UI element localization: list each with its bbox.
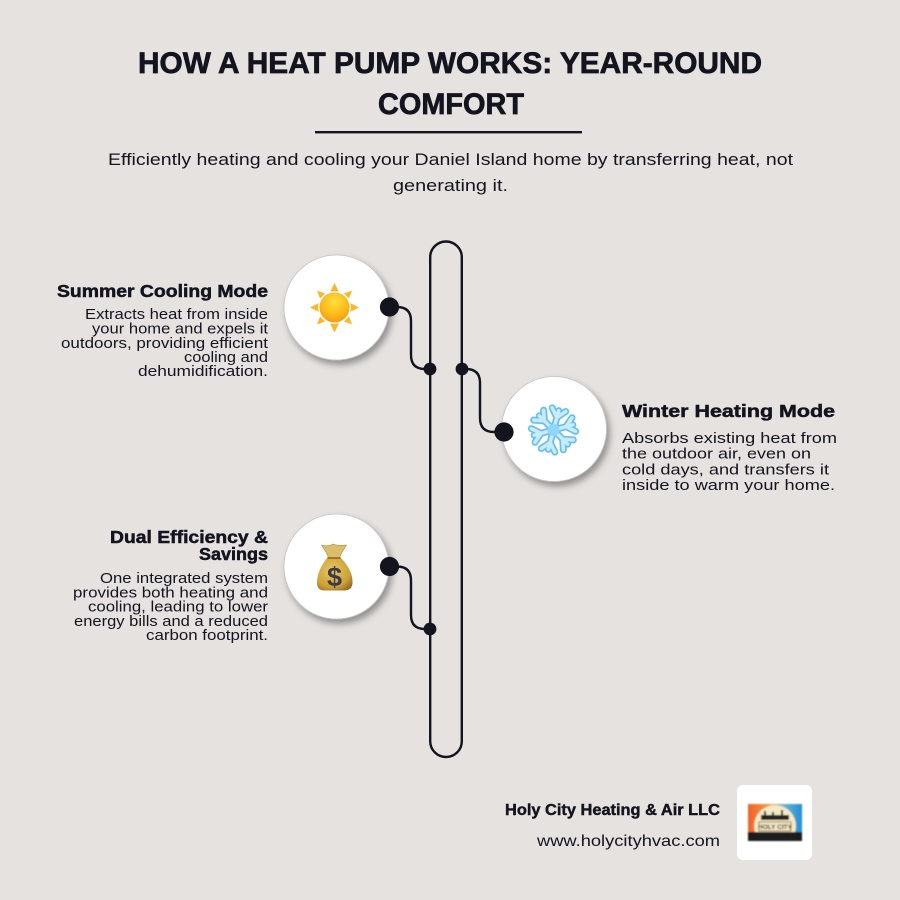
panel: dual efficiency text: energy bills and a reduced	[74, 614, 268, 630]
panel: dual efficiency text: provides both heating and	[73, 586, 268, 602]
junction: summer	[424, 363, 436, 375]
panel: winter heating text: Winter Heating Mode	[622, 401, 835, 421]
panel: winter heating text: cold days, and transfers it	[622, 462, 829, 478]
icon: sun	[284, 255, 389, 360]
title underline	[315, 131, 582, 133]
junction: savings	[424, 623, 436, 635]
panel: winter heating text	[622, 401, 837, 494]
icon: money bag: $	[327, 562, 342, 592]
panel: summer cooling text: outdoors, providing efficient	[61, 336, 268, 352]
footer website: www.holycityhvac.com	[536, 833, 720, 850]
panel: winter heating text: the outdoor air, even on	[622, 446, 811, 462]
dot: savings connector	[380, 557, 399, 576]
subtitle	[108, 150, 793, 195]
icon: snowflake	[502, 376, 606, 482]
panel: summer cooling text: Extracts heat from inside	[85, 307, 268, 323]
central pipe loop	[430, 242, 462, 757]
logo: HOLY CITY	[758, 824, 793, 831]
panel: summer cooling text: your home and expels it	[92, 322, 268, 338]
panel: dual efficiency text: cooling, leading to lower	[88, 600, 268, 616]
title: COMFORT	[378, 88, 524, 121]
title: HOW A HEAT PUMP WORKS: YEAR-ROUND	[138, 47, 762, 80]
panel: summer cooling text: dehumidification.	[138, 364, 268, 380]
icon: money bag	[284, 514, 389, 619]
panel: dual efficiency text: carbon footprint.	[146, 628, 268, 644]
title	[138, 47, 762, 121]
panel: winter heating text: inside to warm your home.	[622, 478, 835, 494]
connector: savings	[390, 566, 430, 629]
connector: summer	[390, 307, 430, 369]
logo	[737, 785, 812, 860]
subtitle: generating it.	[393, 176, 508, 195]
panel: summer cooling text: Summer Cooling Mode	[57, 281, 268, 301]
panel: dual efficiency text: Savings	[199, 544, 268, 564]
footer company name: Holy City Heating & Air LLC	[505, 802, 720, 819]
panel: dual efficiency text	[73, 527, 268, 644]
connector: winter	[462, 369, 504, 432]
panel: dual efficiency text: Dual Efficiency &	[110, 527, 268, 547]
panel: dual efficiency text: One integrated system	[100, 571, 268, 587]
panel: winter heating text: Absorbs existing heat from	[622, 431, 837, 447]
subtitle: Efficiently heating and cooling your Daniel Island home by transferring heat, not	[108, 150, 793, 169]
dot: summer connector	[380, 297, 399, 317]
dot: winter connector	[494, 422, 514, 442]
panel: summer cooling text	[57, 281, 268, 380]
panel: summer cooling text: cooling and	[184, 350, 268, 366]
junction: winter	[456, 363, 468, 375]
